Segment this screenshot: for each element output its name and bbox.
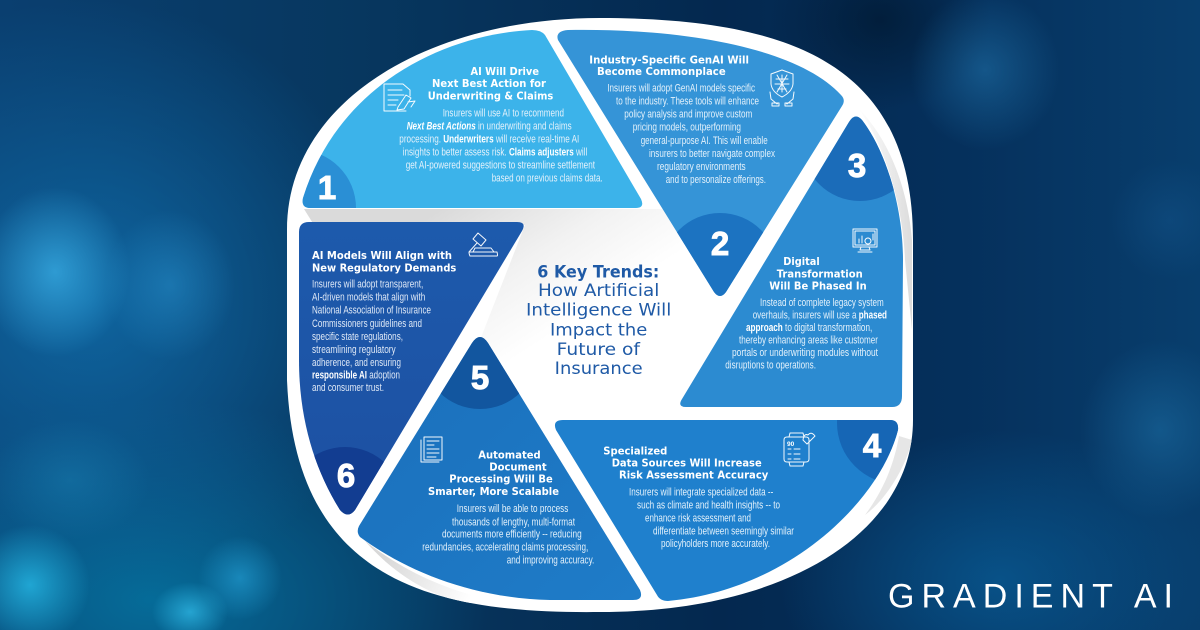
panel 4: specialized data sources: Specialized <box>603 444 667 457</box>
centre shading <box>304 209 720 420</box>
panel 1: next best action: Insurers will use AI to recommend <box>443 107 564 119</box>
panel 6: regulatory demands: and consumer trust. <box>312 382 384 394</box>
panel 2: industry-specific genai: Insurers will adopt GenAI models specific <box>607 83 755 95</box>
panel 3: digital transformation: Transformation <box>777 268 863 280</box>
panel 2: industry-specific genai <box>557 30 844 296</box>
panel 2: industry-specific genai: regulatory environments <box>657 161 746 173</box>
panel 4: specialized data sources <box>554 420 898 601</box>
panel 2: industry-specific genai: Become Commonplace <box>597 65 726 78</box>
panel 6: regulatory demands <box>299 222 524 514</box>
panel 5: automated document processing: and improving accuracy. <box>507 554 594 566</box>
panel 3: digital transformation: approach to digital transformation, <box>746 322 872 334</box>
panel 4: specialized data sources: such as climate and health insights -- to <box>637 500 780 512</box>
centre title: Insurance <box>555 359 643 379</box>
panel 5: automated document processing: redundancies, accelerating claims processing, <box>422 541 588 553</box>
panel 4: specialized data sources: 90 <box>787 441 795 448</box>
panel 3: digital transformation: overhauls, insurers will use a phased <box>753 309 887 321</box>
panel 1: next best action: Next Best Action for <box>432 77 547 90</box>
panel 6: regulatory demands: responsible AI adoption <box>312 369 400 381</box>
panel 3: digital transformation <box>680 116 903 407</box>
panel 4: specialized data sources: differentiate between seemingly similar <box>653 525 794 537</box>
panel 2: industry-specific genai: and to personalize offerings. <box>666 174 766 186</box>
panel 1: next best action: processing. Underwriters will receive real-time AI <box>399 133 579 145</box>
panel 6: regulatory demands: specific state regulations, <box>312 331 403 343</box>
panel 1: next best action: insights to better assess risk. Claims adjusters will <box>403 146 587 158</box>
panel 1: next best action: get AI-powered suggestions to streamline settlement <box>406 160 595 172</box>
panel 3: digital transformation: portals or underwriting modules without <box>732 347 878 359</box>
panel 3: digital transformation: Instead of complete legacy system <box>760 297 884 309</box>
centre title: Impact the <box>550 320 647 340</box>
panel 2: industry-specific genai: to the industry. These tools will enhance <box>616 96 759 108</box>
panel 5: automated document processing: Insurers will be able to process <box>457 503 569 515</box>
panel 5: automated document processing: Document <box>489 461 547 474</box>
centre title: How Artificial <box>538 281 659 301</box>
logo: gradient ai: GRADIENT AI <box>888 578 1173 616</box>
panel 1: next best action: 1 <box>318 169 336 206</box>
panel 5: automated document processing: Smarter, More Scalable <box>428 485 559 498</box>
centre title: 6 Key Trends: <box>537 262 659 282</box>
panel 2: industry-specific genai: insurers to better navigate complex <box>649 148 775 160</box>
panel 3: digital transformation: disruptions to operations. <box>725 359 816 371</box>
panel 1: next best action: Next Best Actions in underwriting and claims <box>407 120 572 132</box>
centre title <box>526 262 671 379</box>
panel 6: regulatory demands: streamlining regulatory <box>312 344 396 356</box>
panel 4: specialized data sources: enhance risk assessment and <box>645 513 751 525</box>
panel 6: regulatory demands: AI Models Will Align with <box>312 249 452 262</box>
panel 3: digital transformation: thereby enhancing areas like customer <box>739 334 878 346</box>
panel 2: industry-specific genai: Industry-Specific GenAI Will <box>589 54 749 67</box>
soft fold shadows <box>365 108 912 604</box>
panel 5: automated document processing: 5 <box>471 359 489 396</box>
panel 6: regulatory demands: New Regulatory Demands <box>312 261 457 274</box>
panel 4: specialized data sources: policyholders more accurately. <box>661 538 770 550</box>
panel 5: automated document processing: documents more efficiently -- reducing <box>442 529 582 541</box>
panel 6: regulatory demands: 6 <box>337 457 355 494</box>
panel 4: specialized data sources: Risk Assessment Accuracy <box>619 469 768 482</box>
panel 2: industry-specific genai: pricing models, outperforming <box>633 122 741 134</box>
white rounded aperture backing shape <box>287 18 913 612</box>
panel 4: specialized data sources: Data Sources Will Increase <box>612 457 762 470</box>
panel 3: digital transformation: Will Be Phased In <box>769 280 867 293</box>
panel 5: automated document processing <box>358 337 642 600</box>
panel 4: specialized data sources: Insurers will integrate specialized data -- <box>629 487 774 499</box>
panel 1: next best action: Underwriting & Claims <box>428 89 554 102</box>
panel 4: specialized data sources: 4 <box>863 427 882 464</box>
panel 6: regulatory demands: AI-driven models that align with <box>312 292 425 304</box>
panel 5: automated document processing: thousands of lengthy, multi-format <box>452 516 575 528</box>
panel 6: regulatory demands: Insurers will adopt transparent, <box>312 279 423 291</box>
panel 1: next best action <box>302 30 642 208</box>
panel 3: digital transformation: 3 <box>848 147 866 184</box>
panel 1: next best action: AI Will Drive <box>470 65 539 78</box>
panel 2: industry-specific genai: general-purpose AI. This will enable <box>641 135 768 147</box>
panel 6: regulatory demands: Commissioners guidelines and <box>312 318 422 330</box>
panel 2: industry-specific genai: policy analysis and improve custom <box>624 109 752 121</box>
panel 2: industry-specific genai: 2 <box>711 225 729 262</box>
panel 5: automated document processing: Automated <box>478 448 541 461</box>
panel 5: automated document processing: Processing Will Be <box>449 473 553 486</box>
centre title: Intelligence Will <box>526 301 671 321</box>
centre title: Future of <box>557 340 641 360</box>
panel 6: regulatory demands: National Association of Insurance <box>312 305 431 317</box>
panel 6: regulatory demands: adherence, and ensuring <box>312 357 401 369</box>
panel 3: digital transformation: Digital <box>783 255 820 268</box>
panel 1: next best action: based on previous claims data. <box>492 172 603 184</box>
